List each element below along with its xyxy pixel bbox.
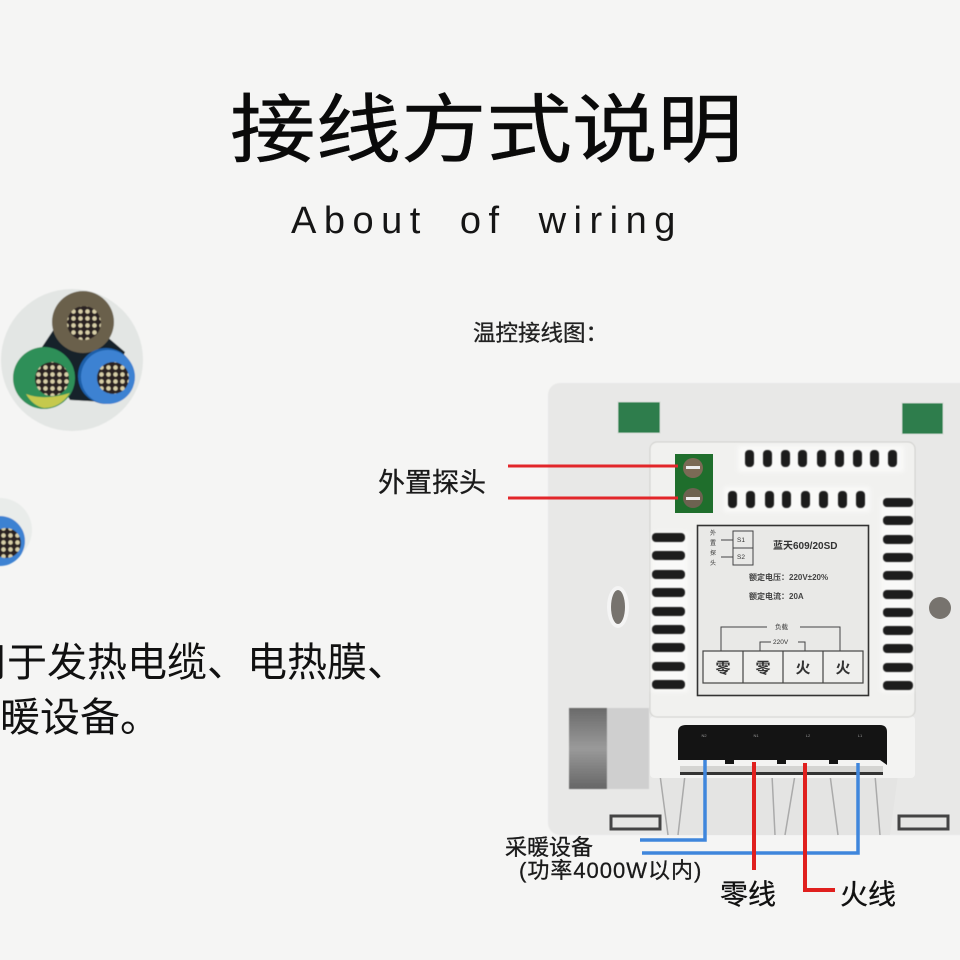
load text: 负载 [775, 622, 788, 631]
probe terminal text: 探 [710, 549, 716, 557]
thermostat back panel [548, 383, 960, 835]
probe terminal text: 头 [710, 559, 716, 567]
subtitle: About of wiring [291, 200, 683, 242]
probe terminal text: 置 [710, 540, 716, 547]
description text [0, 641, 407, 740]
black connector [678, 725, 887, 775]
terminal cells [703, 651, 863, 683]
module body [650, 442, 915, 717]
probe terminal text: S2 [737, 554, 745, 561]
wire window [569, 708, 649, 789]
terminal housing [650, 716, 915, 778]
red neutral wire [752, 762, 756, 870]
top clips [618, 402, 943, 434]
heating device label [505, 835, 702, 883]
load text: 220V [773, 639, 789, 646]
probe terminal text: S1 [737, 537, 745, 544]
black connector: N2 [701, 733, 707, 738]
black connector: N1 [753, 733, 759, 738]
vent highlight bands [652, 446, 913, 692]
neutral label: 零线 [720, 879, 776, 910]
wiring diagram heading: 温控接线图： [473, 321, 608, 346]
probe terminals S1 S2 [721, 531, 753, 565]
red probe wires [508, 466, 678, 498]
green probe terminal [675, 454, 713, 513]
black connector: L1 [858, 733, 863, 738]
bottom slots [611, 816, 948, 829]
heating device label: 采暖设备 [505, 835, 593, 860]
model name: 蓝天609/20SD [773, 539, 837, 552]
probe label: 外置探头 [378, 468, 486, 498]
icon: three-core cable [1, 289, 143, 431]
lower legs [660, 775, 898, 835]
terminal cells: 火 [795, 660, 811, 677]
icon: cropped cable [0, 498, 32, 566]
terminal cells: 火 [835, 660, 851, 677]
load bracket [721, 627, 840, 651]
rating text [749, 572, 828, 601]
top vent slots [728, 450, 897, 508]
right vent slots [883, 498, 913, 690]
left vent slots [652, 533, 685, 689]
terminal cells: 零 [755, 660, 771, 677]
blue load wires [640, 760, 858, 853]
red live wire [805, 763, 835, 890]
terminal cells: 零 [715, 660, 731, 677]
load text [773, 622, 789, 646]
heating device label: (功率4000W以内) [519, 858, 702, 883]
live label: 火线 [840, 879, 896, 910]
probe terminal text: 外 [710, 529, 716, 537]
rating text: 额定电压：220V±20% [749, 572, 828, 582]
mounting holes [607, 586, 951, 628]
title: 接线方式说明 [230, 89, 743, 173]
printed label [698, 526, 868, 696]
probe terminal text [710, 529, 745, 567]
rating text: 额定电流：20A [749, 591, 804, 601]
base plate [548, 383, 960, 835]
black connector: L2 [806, 733, 811, 738]
